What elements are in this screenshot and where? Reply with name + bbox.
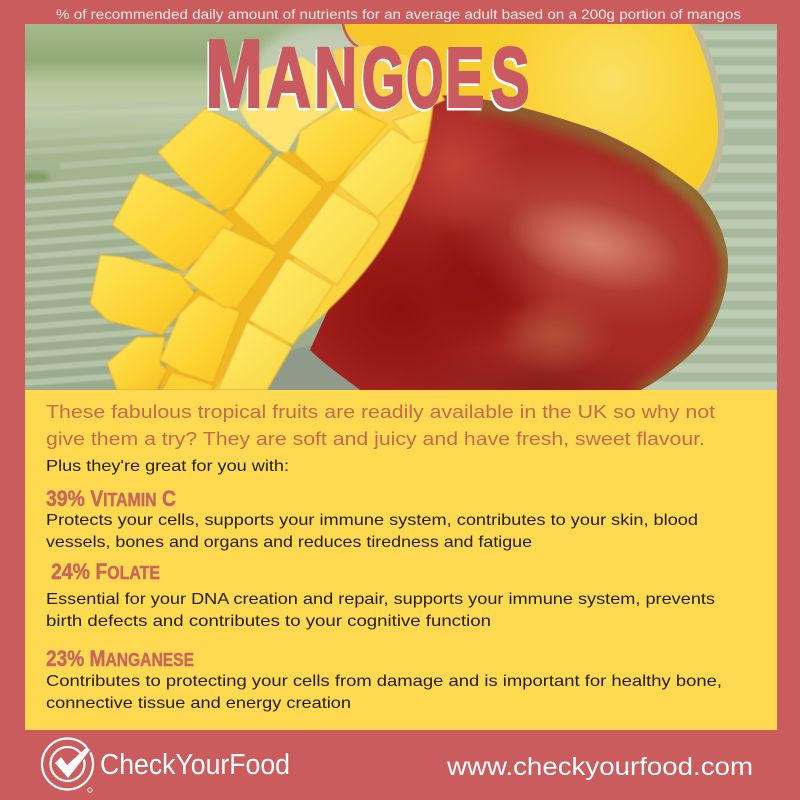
- title: Mangoes: [204, 19, 529, 130]
- intro text: [46, 401, 715, 449]
- title: Mangoes: M: [204, 22, 261, 130]
- icon: CheckYourFood logo mark: [42, 738, 93, 792]
- nutrient: manganese: 23% MANGANESE: [46, 646, 194, 671]
- photo: mango on a green leaf: [22, 24, 777, 425]
- title: Mangoes: E: [446, 32, 484, 125]
- cubed mango flesh: [90, 45, 445, 390]
- panel: nutrition text: [25, 390, 777, 730]
- nutrient: manganese: connective tissue and energy creation: [46, 695, 351, 712]
- title: Mangoes: O: [406, 31, 443, 125]
- nutrient: folate: birth defects and contributes to your cognitive function: [46, 613, 491, 630]
- mango: red skin: [310, 95, 728, 390]
- nutrient: vitamin C: Protects your cells, supports your immune system, contributes to your skin, blood: [46, 512, 698, 529]
- title: Mangoes: A: [266, 31, 311, 125]
- nutrient: folate: Essential for your DNA creation and repair, supports your immune system, prevents: [46, 591, 715, 608]
- nutrient: folate: [46, 559, 715, 630]
- intro text: These fabulous tropical fruits are readily available in the UK so why not: [46, 401, 715, 422]
- nutrient: folate: 24% FOLATE: [51, 559, 160, 584]
- title: Mangoes: G: [362, 32, 404, 125]
- nutrient: manganese: [46, 646, 722, 712]
- title: Mangoes: N: [313, 34, 355, 128]
- title: Mangoes: G: [360, 34, 403, 128]
- title: Mangoes: A: [265, 34, 309, 127]
- logo wordmark: CheckYourFood: [100, 749, 290, 781]
- nutrient: vitamin C: vessels, bones and organs and reduces tiredness and fatigue: [46, 534, 532, 551]
- intro text: give them a try? They are soft and juicy and have fresh, sweet flavour.: [46, 428, 705, 449]
- title: Mangoes: E: [444, 35, 483, 128]
- nutrient: manganese: Contributes to protecting your cells from damage and is important for healthy bone,: [46, 673, 722, 690]
- title: Mangoes: S: [491, 32, 529, 125]
- website address: www.checkyourfood.com: [446, 753, 753, 781]
- title: Mangoes: S: [490, 34, 528, 128]
- lead-in line: Plus they're great for you with:: [46, 458, 289, 475]
- mango half: yellow flesh: [343, 24, 725, 197]
- title: Mangoes: O: [405, 34, 441, 128]
- title: Mangoes: N: [314, 31, 357, 125]
- title: Mangoes: M: [206, 19, 263, 127]
- nutrient: vitamin C: [46, 486, 698, 551]
- nutrient: vitamin C: 39% VITAMIN C: [46, 486, 176, 511]
- subtitle: portion note: % of recommended daily amount of nutrients for an average adult based on a 200g portion of mangos: [56, 7, 741, 22]
